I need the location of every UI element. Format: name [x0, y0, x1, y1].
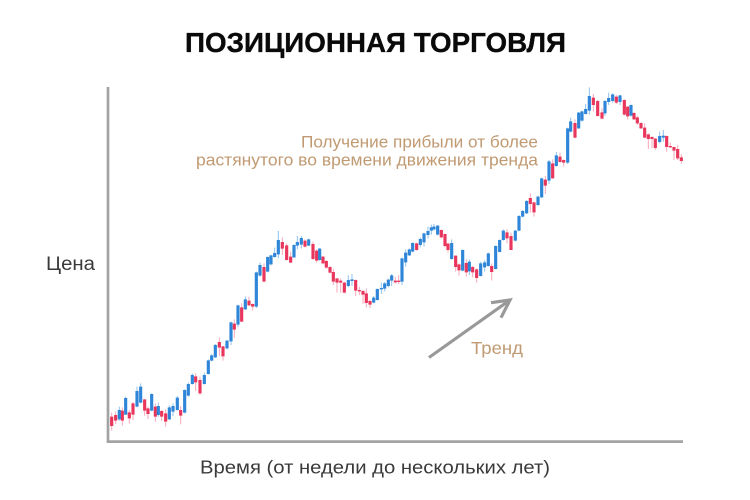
y-axis label: price: Цена	[46, 254, 95, 275]
title: ПОЗИЦИОННАЯ ТОРГОВЛЯ	[185, 27, 566, 58]
annotation: profit from trend movement	[196, 133, 539, 170]
annotation: profit from trend movement: Получение прибыли от более	[301, 133, 538, 152]
trend arrow	[429, 300, 510, 358]
annotation: profit from trend movement: растянутого во времени движения тренда	[196, 151, 539, 170]
candles: first pullback and second rally	[301, 224, 500, 308]
candles: final rally and top	[503, 87, 681, 250]
chart axes	[108, 87, 683, 442]
trend label: Тренд	[471, 338, 523, 358]
candlestick chart	[112, 87, 681, 431]
candles: first rally	[112, 231, 297, 431]
x-axis label: time: Время (от недели до нескольких лет)	[200, 456, 550, 478]
